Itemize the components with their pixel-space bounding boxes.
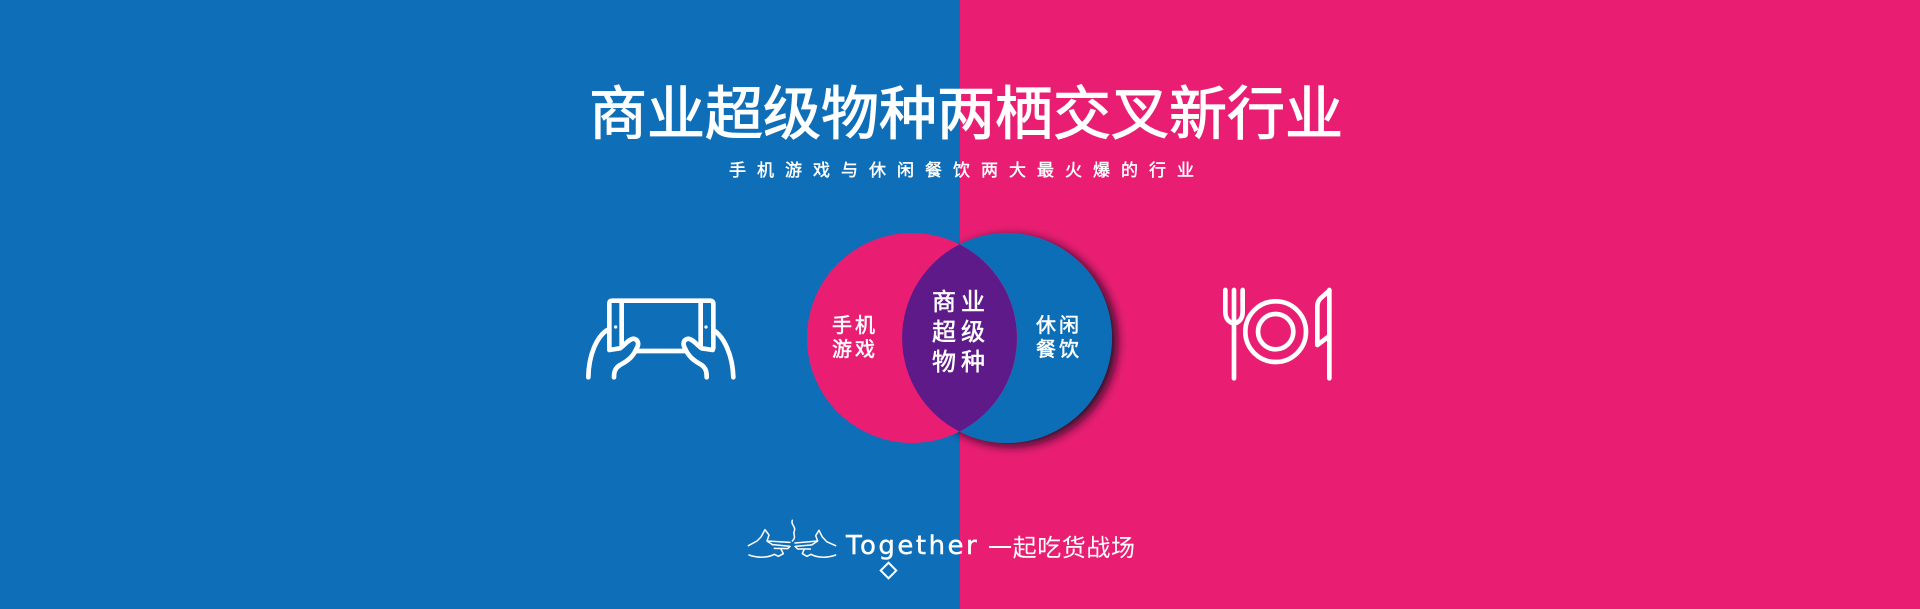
logo: g descender diamond [879, 561, 897, 579]
logo: Together wordmark: Together [846, 531, 979, 561]
background: right pink half [960, 0, 1920, 609]
venn label: casual dining [1036, 314, 1082, 361]
venn label: centre: 物种 [932, 349, 990, 376]
venn label: casual dining: 休闲 [1036, 315, 1082, 337]
venn label: casual dining: 餐饮 [1036, 339, 1082, 361]
background: left blue half [0, 0, 960, 609]
venn label: centre [932, 289, 990, 376]
subtitle: 手机游戏与休闲餐饮两大最火爆的行业 [729, 161, 1205, 180]
venn label: centre: 商业 [932, 289, 990, 316]
venn: left circle [807, 233, 1017, 443]
icon: plate with fork and knife [1223, 288, 1332, 381]
venn label: centre: 超级 [932, 319, 990, 346]
icon: hands holding tablet [586, 298, 736, 380]
venn label: mobile games: 手机 [832, 315, 878, 337]
venn: overlap [902, 244, 1017, 432]
title: 商业超级物种两栖交叉新行业 [589, 82, 1343, 147]
logo: Chinese slogan: 一起吃货战场 [988, 535, 1136, 562]
venn label: mobile games: 游戏 [832, 339, 878, 361]
logo: Together hands [748, 520, 836, 558]
venn label: mobile games [832, 314, 878, 361]
venn: right circle [902, 233, 1112, 443]
